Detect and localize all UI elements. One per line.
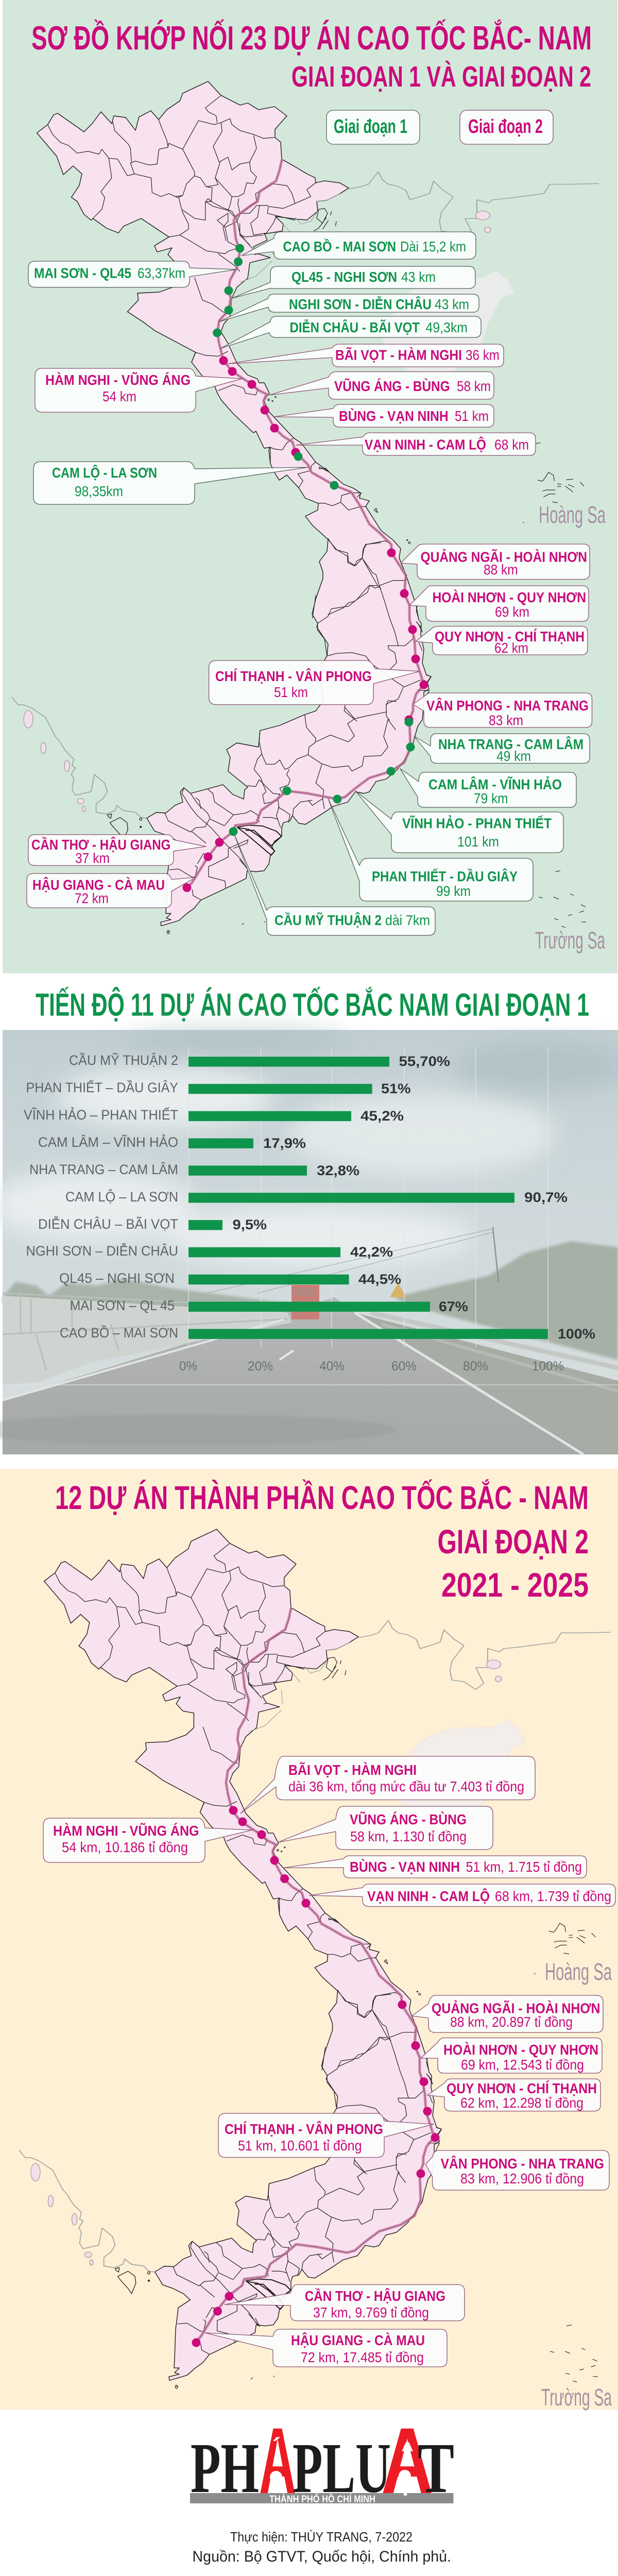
chart x axis: 40% (319, 1359, 345, 1374)
callout: Mai Sơn - QL45 (28, 261, 237, 287)
callout: QL45 - Nghi Sơn: QL45 - NGHI SƠN (291, 269, 397, 285)
callout: Bãi Vọt - Hàm Nghi: BÃI VỌT - HÀM NGHI (335, 347, 462, 363)
callout: Hoài Nhơn - Quy Nhơn (phase 2): HOÀI NHƠN - QUY NHƠN (443, 2042, 598, 2058)
callout: Vũng Áng - Bùng (phase 2) (278, 1806, 493, 1850)
callout: Phan Thiết - Dầu Giây (328, 799, 533, 901)
bar values: 17,9% (263, 1136, 306, 1151)
callout: Vũng Áng - Bùng (phase 2): VŨNG ÁNG - BÙNG (350, 1811, 467, 1827)
callout: Quảng Ngãi - Hoài Nhơn (phase 2): 88 km, 20.897 tỉ đồng (450, 2014, 573, 2030)
chart x axis: 20% (248, 1359, 273, 1374)
callout: Vĩnh Hảo - Phan Thiết: 101 km (457, 834, 499, 850)
callout: Bãi Vọt - Hàm Nghi (phase 2) (241, 1756, 535, 1814)
legend (327, 110, 553, 144)
credits: Thực hiện: THÙY TRANG, 7-2022 (230, 2529, 413, 2545)
callout: Diễn Châu - Bãi Vọt: DIỄN CHÂU - BÃI VỌT (289, 319, 420, 335)
callout: Quy Nhơn - Chí Thạnh: 62 km (494, 640, 528, 656)
credits: Nguồn: Bộ GTVT, Quốc hội, Chính phủ. (193, 2548, 451, 2565)
callout: Nha Trang - Cam Lâm: 49 km (496, 748, 531, 764)
bar labels: CAO BỒ – MAI SƠN (60, 1325, 178, 1341)
map of Vietnam: first panel (12, 81, 599, 934)
chart x axis: 60% (391, 1359, 417, 1374)
bar values: 55,70% (399, 1054, 450, 1069)
bar values: 100% (558, 1326, 595, 1342)
callout: Phan Thiết - Dầu Giây: PHAN THIẾT - DẦU GIÂY (372, 869, 518, 885)
callout: Bãi Vọt - Hàm Nghi (phase 2): BÃI VỌT - HÀM NGHI (288, 1762, 417, 1778)
bar labels: QL45 – NGHI SƠN (59, 1270, 175, 1286)
bar values: 44,5% (358, 1272, 401, 1287)
bar labels (24, 1052, 178, 1341)
callout: Bùng - Vạn Ninh (phase 2): 51 km, 1.715 tỉ đồng (466, 1859, 582, 1875)
callout: Nghi Sơn - Diễn Châu (219, 294, 479, 321)
callout: Hậu Giang - Cà Mau (phase 2) (205, 2329, 447, 2367)
callout: Vạn Ninh - Cam Lộ: VẠN NINH - CAM LỘ (365, 436, 486, 453)
logo: Pháp Luật (190, 2408, 454, 2513)
logo: Pháp Luật: A (259, 2408, 296, 2513)
map of Vietnam: second panel (19, 1529, 611, 2388)
callout: Cam Lộ - La Sơn: 98,35km (75, 483, 123, 499)
callout: Vạn Ninh - Cam Lộ: 68 km (494, 437, 529, 453)
callout: Vũng Áng - Bùng (phase 2): 58 km, 1.130 tỉ đồng (350, 1828, 467, 1844)
callout: Cam Lâm - Vĩnh Hảo (400, 769, 576, 807)
title: second map (55, 1479, 589, 1604)
callout: Mai Sơn - QL45: MAI SƠN - QL45 (34, 265, 131, 281)
callout: Hàm Nghi - Vũng Áng: 54 km (102, 388, 136, 404)
callout: Vạn Ninh - Cam Lộ (296, 433, 536, 455)
callout: Hoài Nhơn - Quy Nhơn: 69 km (495, 604, 529, 620)
callout: QL45 - Nghi Sơn: 43 km (401, 269, 436, 285)
callout: Cầu Mỹ Thuận 2 (233, 832, 435, 936)
logo: Pháp Luật: ^ (401, 2438, 414, 2461)
bar labels: NGHI SƠN – DIỄN CHÂU (26, 1243, 178, 1259)
callout: Bùng - Vạn Ninh (phase 2): BÙNG - VẠN NINH (350, 1859, 460, 1875)
chart x axis (179, 1359, 564, 1374)
callout: Cần Thơ - Hậu Giang (phase 2) (225, 2284, 465, 2321)
panel: map of 12 projects phase 2 (0, 1469, 618, 2411)
logo: Pháp Luật: A (381, 2408, 434, 2513)
bar values: 90,7% (524, 1190, 568, 1205)
callout: Nha Trang - Cam Lâm (414, 734, 590, 764)
callout: Cần Thơ - Hậu Giang (28, 835, 206, 866)
callout: Vũng Áng - Bùng (269, 372, 494, 399)
bar chart (24, 1052, 595, 1342)
callout: Quảng Ngãi - Hoài Nhơn (401, 544, 590, 579)
callout: Hàm Nghi - Vũng Áng (phase 2): 54 km, 10.186 tỉ đồng (62, 1839, 188, 1855)
callout: Bùng - Vạn Ninh: BÙNG - VẠN NINH (339, 408, 449, 424)
logo: Pháp Luật: PLU (293, 2429, 391, 2508)
callout: Quảng Ngãi - Hoài Nhơn (phase 2) (412, 1995, 603, 2032)
logo: Pháp Luật: ´ (272, 2433, 281, 2462)
bar values: 42,2% (350, 1244, 393, 1260)
callout: Quy Nhơn - Chí Thạnh (416, 626, 588, 656)
callout: Mai Sơn - QL45: 63,37km (138, 265, 185, 281)
callout: Chí Thạnh - Vân Phong: 51 km (274, 684, 308, 700)
callout: Hậu Giang - Cà Mau: 72 km (75, 890, 109, 906)
callout: Vĩnh Hảo - Phan Thiết (355, 791, 563, 853)
callout: Cần Thơ - Hậu Giang (phase 2): CẦN THƠ - HẬU GIANG (305, 2288, 445, 2304)
callout: Quảng Ngãi - Hoài Nhơn: 88 km (484, 562, 518, 578)
bar labels: NHA TRANG – CAM LÂM (29, 1161, 178, 1177)
callout: Vũng Áng - Bùng: VŨNG ÁNG - BÙNG (334, 378, 450, 394)
bar labels: CAM LÂM – VĨNH HẢO (38, 1133, 178, 1150)
callout: Chí Thạnh - Vân Phong (209, 660, 420, 705)
callout: Chí Thạnh - Vân Phong (phase 2) (218, 2113, 434, 2158)
legend: Giai đoạn 2 (468, 116, 543, 138)
callout: Diễn Châu - Bãi Vọt: 49,3km (425, 319, 468, 335)
callout: Bùng - Vạn Ninh (phase 2) (284, 1856, 587, 1878)
callout: Cam Lộ - La Sơn (33, 462, 308, 504)
callout: Quy Nhơn - Chí Thạnh: QUY NHƠN - CHÍ THẠNH (435, 629, 585, 645)
callout: Cầu Mỹ Thuận 2: dài 7km (385, 912, 430, 928)
callout: Vân Phong - Nha Trang (413, 693, 592, 728)
chart x axis: 0% (179, 1359, 197, 1374)
callout: Cam Lộ - La Sơn: CAM LỘ - LA SƠN (52, 464, 157, 481)
callout: Chí Thạnh - Vân Phong (phase 2): 51 km, 10.601 tỉ đồng (238, 2138, 362, 2154)
bar labels: DIỄN CHÂU – BÃI VỌT (38, 1216, 178, 1232)
project markers: second map (192, 1806, 440, 2347)
callout: Nghi Sơn - Diễn Châu: NGHI SƠN - DIỄN CHÂU (289, 296, 432, 312)
title: second map: 2021 - 2025 (441, 1566, 589, 1604)
callout: Bãi Vọt - Hàm Nghi (phase 2): dài 36 km, tổng mức đầu tư 7.403 tỉ đồng (288, 1778, 524, 1794)
callout: Vĩnh Hảo - Phan Thiết: VĨNH HẢO - PHAN THIẾT (402, 815, 552, 832)
credits (193, 2529, 451, 2565)
bar labels: MAI SƠN – QL 45 (70, 1298, 175, 1313)
callout: Vạn Ninh - Cam Lộ (phase 2): VẠN NINH - CAM LỘ (367, 1888, 490, 1904)
callout: Vân Phong - Nha Trang: 83 km (489, 713, 523, 728)
callout: Nghi Sơn - Diễn Châu: 43 km (435, 296, 469, 312)
callout: Cần Thơ - Hậu Giang (phase 2): 37 km, 9.769 tỉ đồng (313, 2304, 429, 2320)
bar values: 67% (439, 1299, 468, 1314)
callout: Cao Bồ - Mai Sơn: Dài 15,2 km (400, 239, 466, 255)
bar values: 51% (381, 1081, 411, 1096)
logo: Pháp Luật: THÀNH PHỐ HỒ CHÍ MINH (269, 2494, 375, 2505)
callout: Vân Phong - Nha Trang (phase 2) (425, 2150, 609, 2190)
callout: Quảng Ngãi - Hoài Nhơn (phase 2): QUẢNG NGÃI - HOÀI NHƠN (432, 2000, 600, 2016)
callout: Cam Lâm - Vĩnh Hảo: 79 km (474, 790, 508, 806)
chart gridlines (188, 1047, 548, 1347)
callout: Diễn Châu - Bãi Vọt (221, 316, 481, 348)
callout: Chí Thạnh - Vân Phong: CHÍ THẠNH - VÂN PHONG (215, 668, 372, 684)
callout: Quy Nhơn - Chí Thạnh (phase 2) (427, 2079, 600, 2111)
callout: Cam Lâm - Vĩnh Hảo: CAM LÂM - VĨNH HẢO (428, 776, 562, 792)
callout: Hậu Giang - Cà Mau (phase 2): 72 km, 17.485 tỉ đồng (301, 2349, 424, 2365)
bar values: 9,5% (233, 1217, 267, 1232)
callout: Bùng - Vạn Ninh: 51 km (455, 408, 489, 424)
chart x axis: 80% (463, 1359, 488, 1374)
logo: Pháp Luật: PH (191, 2429, 259, 2508)
callout: Cao Bồ - Mai Sơn: CAO BỒ - MAI SƠN (283, 239, 396, 255)
callout: Quy Nhơn - Chí Thạnh (phase 2): 62 km, 12.298 tỉ đồng (460, 2095, 583, 2111)
callout: Hàm Nghi - Vũng Áng (35, 368, 242, 412)
chart x axis: 100% (532, 1359, 564, 1374)
callout: Cầu Mỹ Thuận 2: CẦU MỸ THUẬN 2 (274, 912, 382, 928)
callout: Vân Phong - Nha Trang (phase 2): 83 km, 12.906 tỉ đồng (460, 2171, 584, 2187)
callout: Quy Nhơn - Chí Thạnh (phase 2): QUY NHƠN - CHÍ THẠNH (447, 2080, 597, 2096)
callout: Vân Phong - Nha Trang: VÂN PHONG - NHA TRANG (426, 698, 589, 714)
callout: Cần Thơ - Hậu Giang: CẦN THƠ - HẬU GIANG (31, 837, 170, 853)
bar labels: PHAN THIẾT – DẦU GIÂY (26, 1079, 178, 1095)
callout: Cần Thơ - Hậu Giang: 37 km (75, 850, 110, 866)
callout: Hoài Nhơn - Quy Nhơn (phase 2) (421, 2038, 602, 2073)
callout: QL45 - Nghi Sơn (232, 266, 475, 298)
project markers: first map (182, 244, 428, 892)
callout: Hoài Nhơn - Quy Nhơn: HOÀI NHƠN - QUY NHƠN (433, 589, 586, 605)
callout: Phan Thiết - Dầu Giây: 99 km (436, 883, 471, 899)
panel: progress chart on road photo (0, 1028, 618, 1454)
callout: Vũng Áng - Bùng: 58 km (457, 378, 491, 394)
callout: Cao Bồ - Mai Sơn (242, 232, 476, 259)
callout: Vạn Ninh - Cam Lộ (phase 2) (310, 1884, 615, 1906)
callout: Hàm Nghi - Vũng Áng (phase 2) (43, 1818, 252, 1862)
callout: Hoài Nhơn - Quy Nhơn (phase 2): 69 km, 12.543 tỉ đồng (461, 2057, 584, 2073)
bar values (233, 1054, 595, 1342)
callout: Hậu Giang - Cà Mau (27, 874, 196, 908)
title: first map (31, 19, 592, 93)
callout: Hoài Nhơn - Quy Nhơn (409, 586, 589, 621)
legend: Giai đoạn 1 (334, 116, 407, 138)
bar values: 32,8% (317, 1163, 359, 1178)
callout: Bãi Vọt - Hàm Nghi (228, 344, 504, 367)
callout: Hậu Giang - Cà Mau (phase 2): HẬU GIANG - CÀ MAU (291, 2332, 425, 2348)
callout: Hàm Nghi - Vũng Áng: HÀM NGHI - VŨNG ÁNG (45, 372, 191, 388)
panel: map of 23 expressway projects (3, 0, 617, 973)
bar labels: CẦU MỸ THUẬN 2 (69, 1052, 178, 1068)
callout: Quảng Ngãi - Hoài Nhơn: QUẢNG NGÃI - HOÀI NHƠN (420, 549, 587, 565)
callout: Bãi Vọt - Hàm Nghi: 36 km (466, 347, 500, 363)
bar labels: VĨNH HẢO – PHAN THIẾT (24, 1106, 178, 1123)
bar labels: CAM LỘ – LA SƠN (65, 1189, 178, 1205)
callout: Bùng - Vạn Ninh (274, 404, 494, 427)
callout: Hậu Giang - Cà Mau: HẬU GIANG - CÀ MAU (32, 877, 165, 893)
callout: Nha Trang - Cam Lâm: NHA TRANG - CAM LÂM (438, 736, 583, 752)
bar values: 45,2% (360, 1108, 404, 1124)
callout: Hàm Nghi - Vũng Áng (phase 2): HÀM NGHI - VŨNG ÁNG (53, 1823, 199, 1839)
photo backdrop: highway (0, 1028, 618, 1454)
logo: Pháp Luật: T (418, 2429, 454, 2508)
callout: Chí Thạnh - Vân Phong (phase 2): CHÍ THẠNH - VÂN PHONG (225, 2121, 383, 2137)
